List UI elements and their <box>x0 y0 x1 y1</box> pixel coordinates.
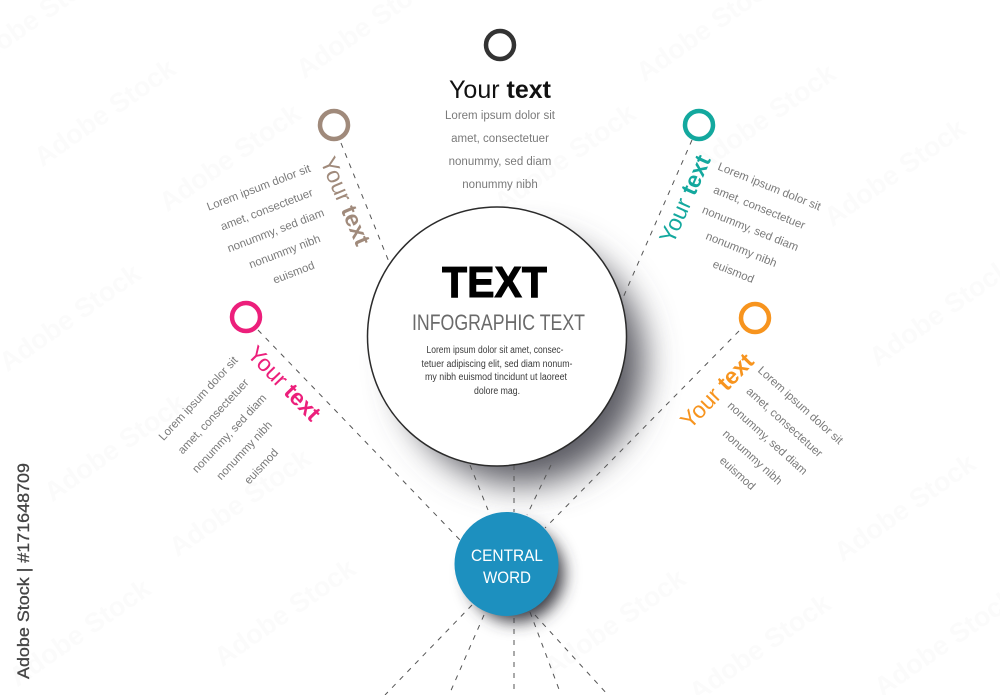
pink item <box>157 303 326 487</box>
brown lines <box>205 163 326 287</box>
pink heading: Your text <box>242 340 326 426</box>
subtitle: INFOGRAPHIC TEXT <box>412 310 585 335</box>
background watermarks: Adobe Stock <box>209 552 362 672</box>
background watermarks: Adobe Stock <box>539 562 692 682</box>
dashed connector lines <box>258 140 739 695</box>
top lines: nonummy nibh <box>462 179 538 191</box>
top lines <box>445 110 556 191</box>
icon: teal ring <box>685 111 713 139</box>
orange lines: nonummy nibh <box>720 428 784 487</box>
teal lines: nonummy, sed diam <box>700 204 800 254</box>
main description: my nibh euismod tincidunt ut laoreet <box>425 372 567 383</box>
orange item <box>675 304 845 493</box>
background watermarks: Adobe Stock <box>29 52 182 172</box>
teal lines: euismod <box>711 259 756 286</box>
background watermarks: Adobe Stock <box>154 97 307 217</box>
pink lines: amet, consectetuer <box>176 377 252 457</box>
teal heading: Your text <box>654 150 716 247</box>
orange lines: Lorem ipsum dolor sit <box>755 365 845 448</box>
teal item <box>654 111 823 286</box>
central word shadow <box>468 526 564 622</box>
brown heading: Your text <box>315 153 376 250</box>
pink lines: nonummy nibh <box>215 419 275 483</box>
orange lines: amet, consectetuer <box>744 386 824 460</box>
background watermarks: Adobe Stock <box>4 572 157 692</box>
pink lines: nonummy, sed diam <box>190 392 269 476</box>
central word circle <box>454 512 558 616</box>
main description: tetuer adipiscing elit, sed diam nonum- <box>422 359 572 370</box>
teal lines: amet, consectetuer <box>712 184 807 232</box>
top lines: nonummy, sed diam <box>449 156 551 168</box>
main description: dolore mag. <box>474 386 520 397</box>
icon: brown ring <box>320 111 348 139</box>
background watermarks: Adobe Stock <box>39 387 192 507</box>
brown lines: Lorem ipsum dolor sit <box>205 163 313 213</box>
brown lines: amet, consectetuer <box>219 187 315 233</box>
main description: Lorem ipsum dolor sit amet, consec- <box>426 345 564 356</box>
top heading: Your text <box>449 76 552 104</box>
brown lines: euismod <box>271 260 316 287</box>
background watermarks: Adobe Stock <box>164 442 317 562</box>
brown lines: nonummy, sed diam <box>226 207 326 255</box>
top lines: Lorem ipsum dolor sit <box>445 110 556 122</box>
background watermarks: Adobe Stock <box>829 447 982 567</box>
icon: dark ring <box>486 31 514 59</box>
background watermarks: Adobe Stock <box>689 57 842 177</box>
icon: orange ring <box>741 304 769 332</box>
brown item <box>205 111 376 287</box>
teal lines: Lorem ipsum dolor sit <box>716 161 823 214</box>
brown lines: nonummy nibh <box>248 233 322 271</box>
orange lines <box>717 365 845 493</box>
teal lines <box>700 161 823 286</box>
pink lines: euismod <box>243 447 281 487</box>
background watermarks: Adobe Stock <box>489 97 642 217</box>
orange lines: euismod <box>717 455 757 493</box>
stock id label: Adobe Stock | #171648709 <box>14 463 33 679</box>
central word circle: WORD <box>483 569 531 587</box>
pink lines: Lorem ipsum dolor sit <box>157 354 241 443</box>
main circle <box>368 207 626 466</box>
main description <box>422 345 572 397</box>
background watermarks: Adobe Stock <box>819 112 972 232</box>
icon: pink ring <box>232 303 260 331</box>
orange lines: nonummy, sed diam <box>725 400 809 478</box>
top lines: amet, consectetuer <box>451 133 549 145</box>
main title: TEXT <box>442 258 547 307</box>
teal lines: nonummy nibh <box>704 231 778 270</box>
pink lines <box>157 354 281 487</box>
main circle shadow <box>400 240 644 484</box>
orange heading: Your text <box>675 348 759 433</box>
top item <box>445 31 556 191</box>
central word circle: CENTRAL <box>471 547 543 565</box>
